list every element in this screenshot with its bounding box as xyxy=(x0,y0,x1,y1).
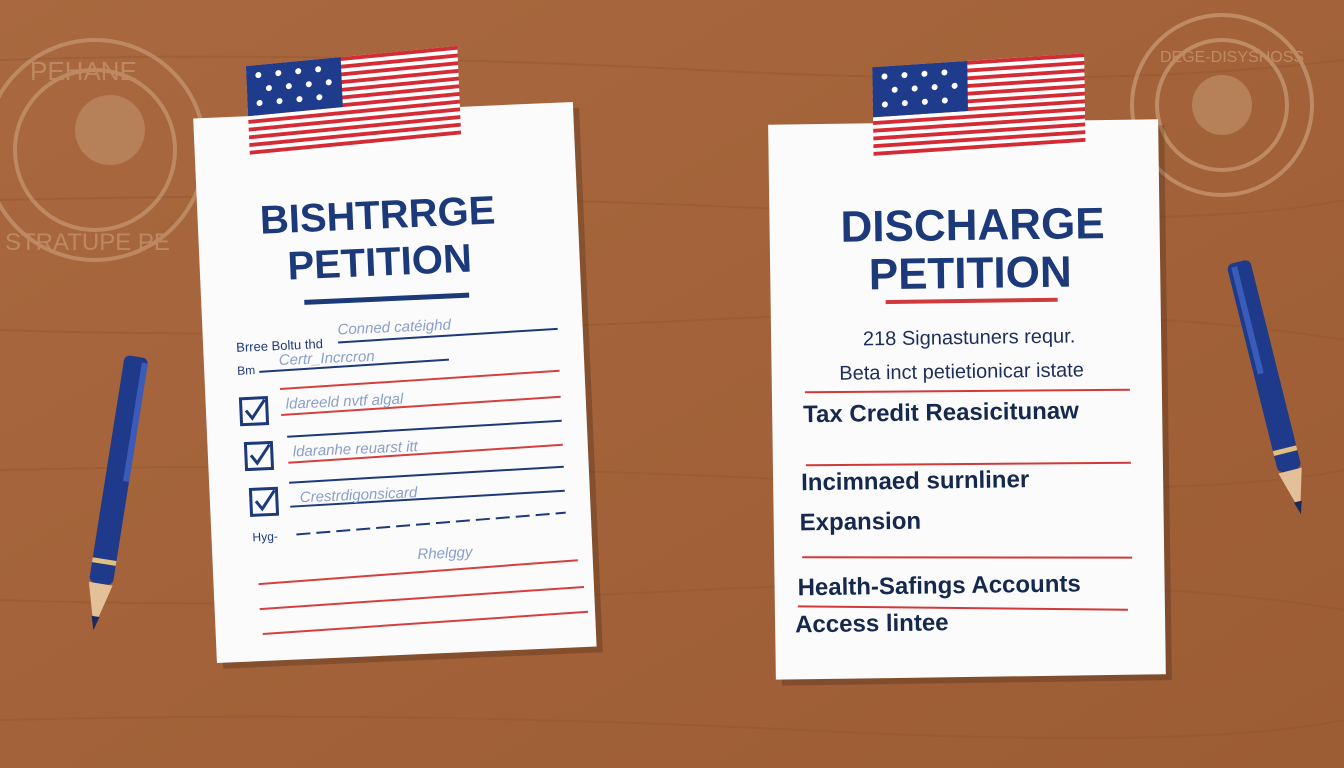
seal: top right xyxy=(1132,15,1312,195)
panel: left petition document xyxy=(191,41,603,669)
seal: top left xyxy=(0,40,205,260)
flag: left xyxy=(246,46,461,158)
flag: right xyxy=(872,53,1085,159)
list of policy items: Access lintee xyxy=(795,609,949,638)
heading: left title: PETITION xyxy=(287,237,473,289)
form lines with checkboxes: Conned catéighd xyxy=(337,316,452,338)
icon: left pen xyxy=(82,355,149,632)
list of policy items: Health-Safings Accounts xyxy=(797,570,1081,601)
text block: requirements xyxy=(839,325,1084,385)
heading: right title xyxy=(840,199,1106,305)
form lines with checkboxes: Brree Boltu thd xyxy=(236,336,323,355)
form lines with checkboxes: Bm xyxy=(237,363,256,378)
heading: right title: PETITION xyxy=(868,248,1072,299)
form lines with checkboxes: Crestrdigonsicard xyxy=(299,484,418,506)
form lines with checkboxes: ldareeld nvtf algal xyxy=(285,391,404,413)
seal: top left: STRATUPE PE xyxy=(5,229,170,256)
text block: requirements: 218 Signastuners requr. xyxy=(863,325,1075,350)
form lines with checkboxes: Rhelggy xyxy=(417,544,474,563)
form lines with checkboxes: ldaranhe reuarst itt xyxy=(292,438,419,461)
heading: left title xyxy=(259,188,499,307)
heading: left title: BISHTRRGE xyxy=(259,188,496,243)
seal: top left: PEHANE xyxy=(30,56,137,86)
panel: right petition document xyxy=(767,52,1172,686)
text block: requirements: Beta inct petietionicar istate xyxy=(839,359,1084,385)
form lines with checkboxes: Certr_Incrcron xyxy=(278,348,375,369)
form lines with checkboxes: Hyg- xyxy=(252,529,278,544)
icon: right pen xyxy=(1226,259,1313,517)
heading: right title: DISCHARGE xyxy=(840,199,1105,252)
form lines with checkboxes xyxy=(235,311,588,635)
seal: top right: DEGE-DISYSHOSS xyxy=(1160,49,1304,66)
list of policy items: Tax Credit Reasicitunaw xyxy=(803,397,1079,428)
list of policy items: Expansion xyxy=(800,508,921,536)
list of policy items: Incimnaed surnliner xyxy=(801,466,1029,496)
list of policy items xyxy=(792,397,1082,638)
